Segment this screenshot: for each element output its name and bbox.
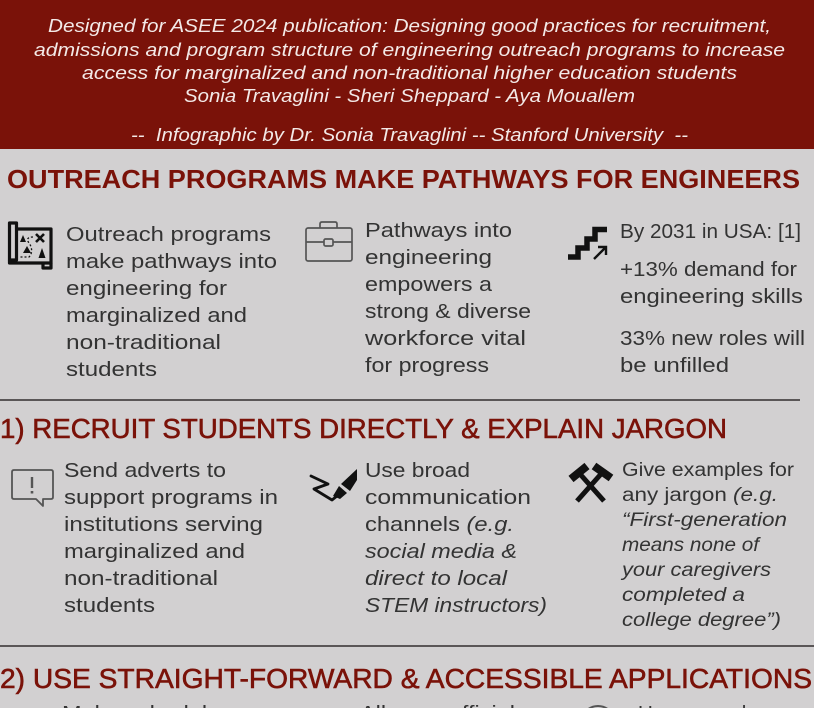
text block: send adverts: marginalized and <box>64 540 245 563</box>
text block: send adverts: institutions serving <box>64 513 263 536</box>
text block: communication channels: STEM instructors) <box>365 594 547 617</box>
text block: USA statistics: engineering skills <box>620 285 803 308</box>
text block: send adverts: non-traditional <box>64 567 218 590</box>
text block: outreach programs: non-traditional <box>66 331 221 354</box>
header banner: access for marginalized and non-traditional higher education students <box>82 62 737 83</box>
icon: clipped circle <box>581 706 615 708</box>
text block: communication channels: direct to local <box>365 567 509 590</box>
section heading 1: 1) RECRUIT STUDENTS DIRECTLY & EXPLAIN JARGON <box>0 413 727 444</box>
text block: outreach programs: engineering for <box>66 277 227 300</box>
text block: USA statistics: 33% new roles will <box>620 327 805 350</box>
text block: send adverts: Send adverts to <box>64 459 226 482</box>
text block: jargon examples: “First-generation <box>622 510 787 531</box>
text block: outreach programs: make pathways into <box>66 250 277 273</box>
section heading 2: 2) USE STRAIGHT-FORWARD & ACCESSIBLE APPLICATIONS <box>0 663 812 694</box>
icon: stairs with arrow <box>568 230 607 259</box>
title: OUTREACH PROGRAMS MAKE PATHWAYS FOR ENGINEERS <box>7 164 800 194</box>
header banner: admissions and program structure of engineering outreach programs to increase <box>34 39 785 60</box>
text block: jargon examples <box>620 460 795 631</box>
text block: outreach programs: Outreach programs <box>66 223 271 246</box>
text block: jargon examples: college degree”) <box>622 610 781 631</box>
header banner: Designed for ASEE 2024 publication: Designing good practices for recruitment, <box>48 15 771 36</box>
text block: USA statistics: be unfilled <box>620 354 729 377</box>
icon: speech bubble with exclamation <box>12 470 53 506</box>
text block: outreach programs <box>66 223 277 381</box>
text block: outreach programs: marginalized and <box>66 304 247 327</box>
icon: pen drawing a squiggle <box>311 469 357 500</box>
text block: pathways: workforce vital <box>364 327 526 350</box>
text block: communication channels: social media & <box>365 540 517 563</box>
text block: jargon examples: your caregivers <box>620 560 772 581</box>
clipped next row of text <box>62 702 768 708</box>
text block: pathways: empowers a <box>365 273 493 296</box>
text block: send adverts: support programs in <box>64 486 278 509</box>
icon: treasure map <box>10 223 51 268</box>
icon: briefcase <box>306 222 352 261</box>
text block: USA statistics: +13% demand for <box>620 258 797 281</box>
text block: send adverts <box>64 459 278 617</box>
text block: pathways: Pathways into <box>365 219 512 242</box>
text block: USA statistics: By 2031 in USA: [1] <box>620 220 801 243</box>
text block: USA statistics <box>620 220 805 377</box>
text block: communication channels: channels (e.g. <box>365 513 514 536</box>
text block: pathways: strong & diverse <box>365 300 531 323</box>
text block: communication channels: communication <box>365 486 531 509</box>
text block: jargon examples: any jargon (e.g. <box>622 485 778 506</box>
header banner: -- Infographic by Dr. Sonia Travaglini -- Stanford University -- <box>131 124 688 145</box>
text block: jargon examples: means none of <box>622 535 761 556</box>
text block: pathways <box>364 219 531 377</box>
text block: jargon examples: completed a <box>622 585 745 606</box>
icon: crossed hammers <box>571 466 611 501</box>
header banner <box>0 0 814 149</box>
text block: communication channels <box>365 459 547 617</box>
text block: outreach programs: students <box>66 358 157 381</box>
text block: pathways: engineering <box>365 246 492 269</box>
text block: communication channels: Use broad <box>365 459 470 482</box>
header banner: Sonia Travaglini - Sheri Sheppard - Aya Mouallem <box>184 85 635 106</box>
text block: pathways: for progress <box>365 354 489 377</box>
text block: send adverts: students <box>64 594 155 617</box>
text block: jargon examples: Give examples for <box>622 460 795 481</box>
